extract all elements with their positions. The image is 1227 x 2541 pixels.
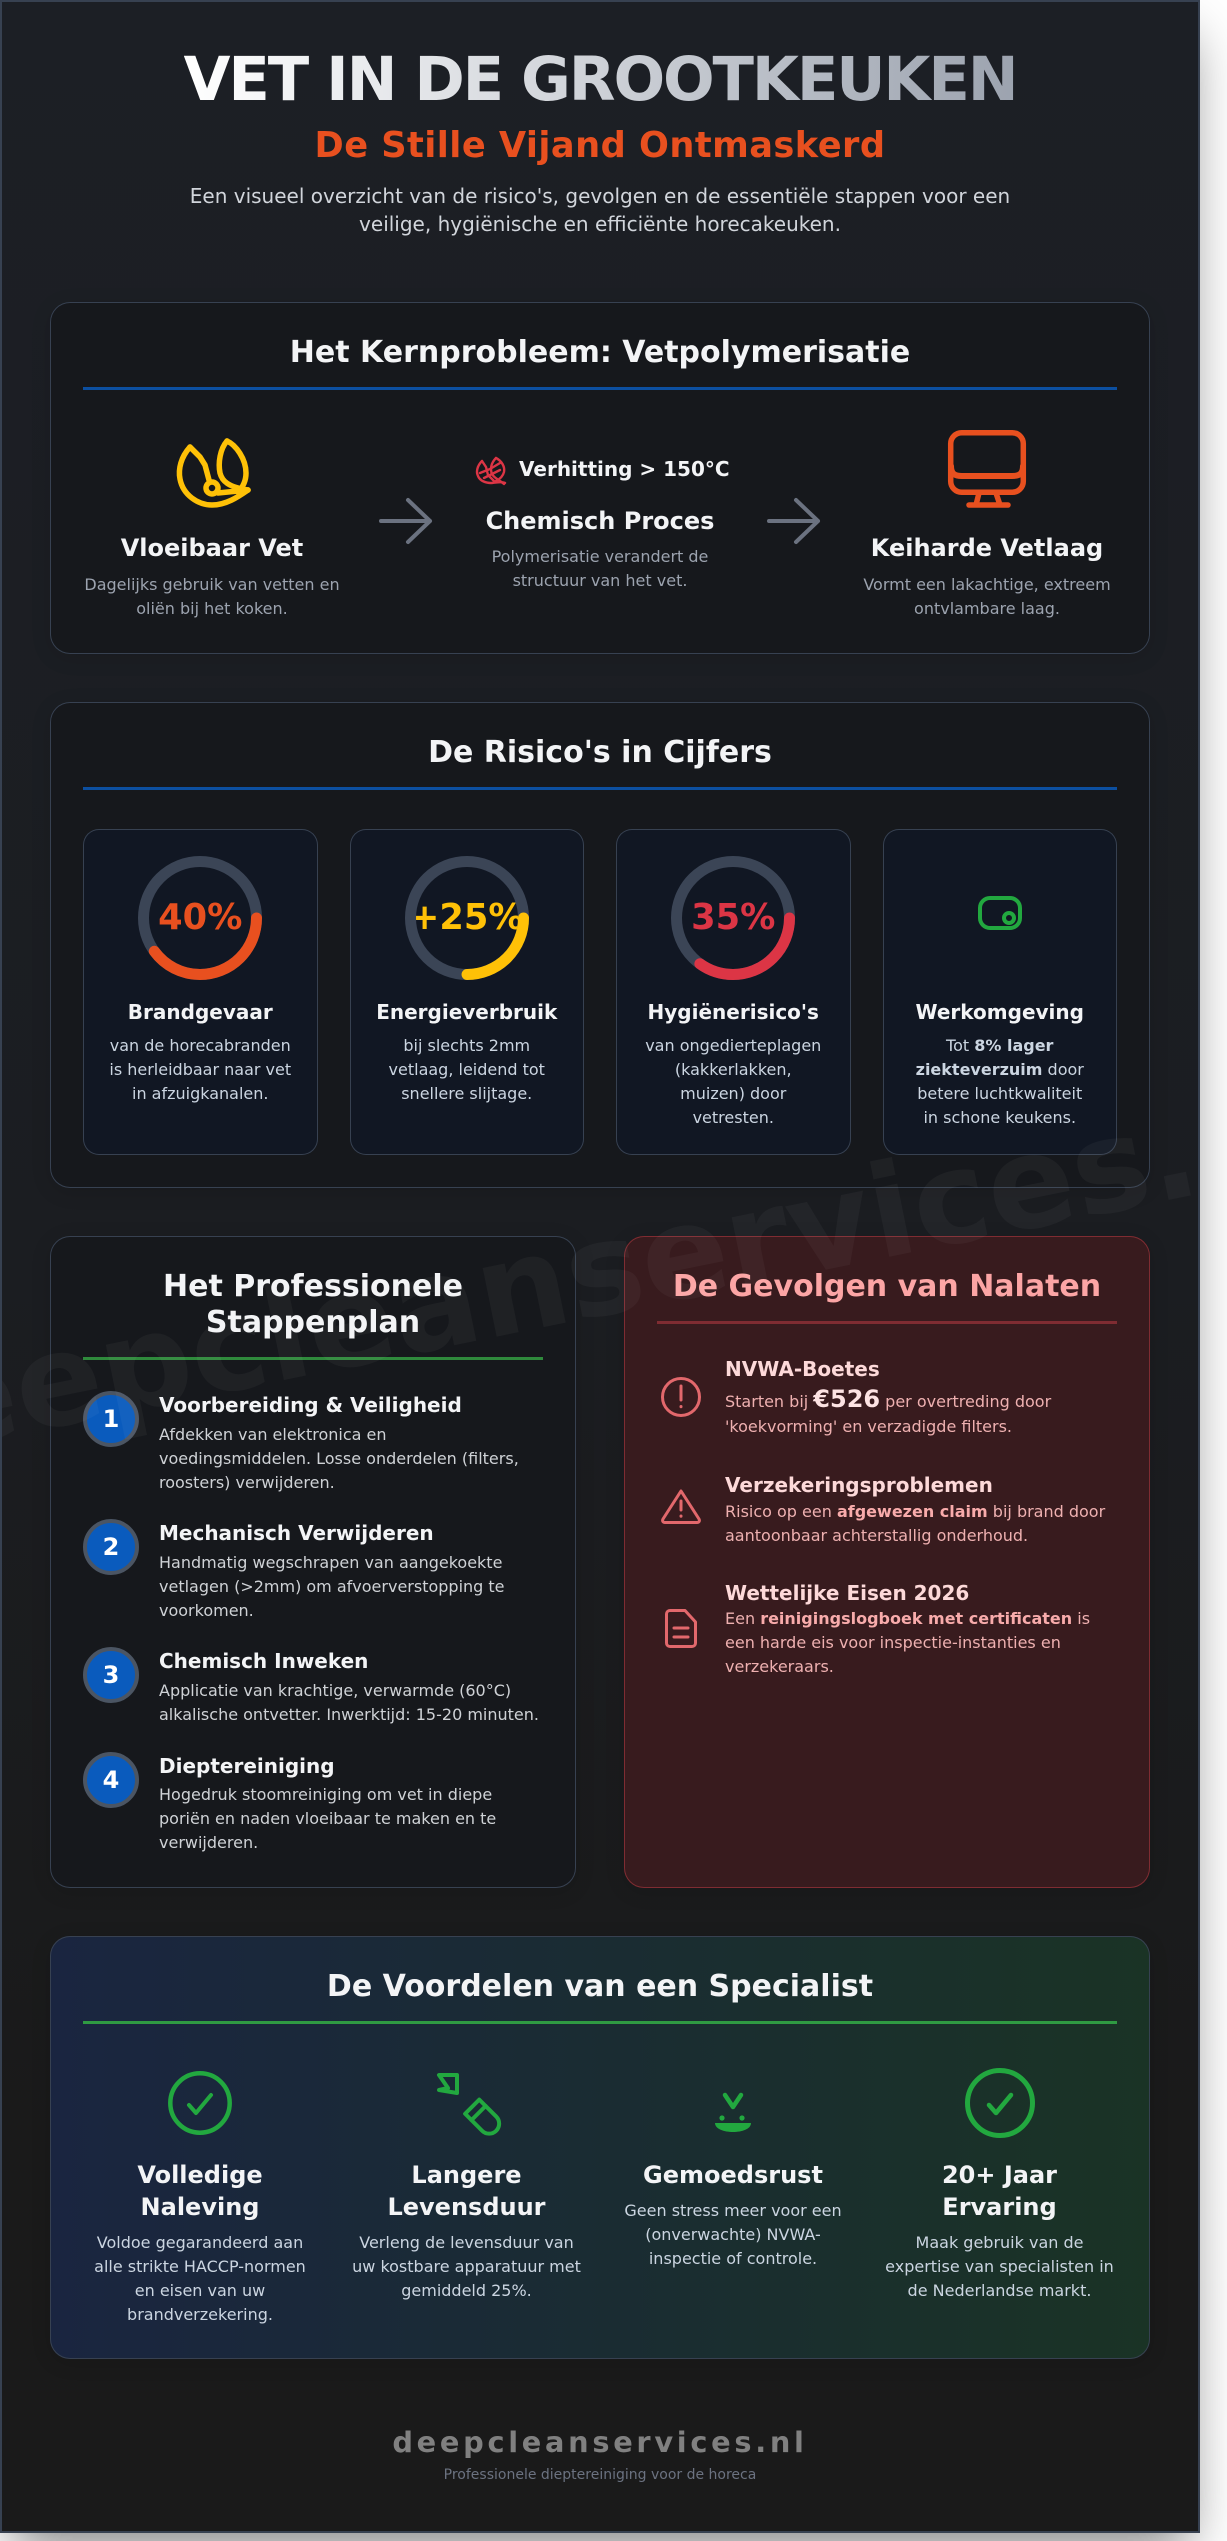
- step text: [159, 1424, 519, 1492]
- label: Energieverbruik: [376, 1000, 557, 1024]
- item: boetes: [661, 1357, 1052, 1436]
- description: [389, 1036, 545, 1102]
- description: [109, 1036, 291, 1102]
- card: energieverbruik: [350, 829, 584, 1155]
- benefit: gemoedsrust: [616, 2066, 850, 2336]
- benefit: naleving: [83, 2066, 317, 2336]
- number badge: [83, 1752, 139, 1808]
- item text: Risico op een afgewezen claim bij brand door: [725, 1502, 1105, 1520]
- step text: alkalische ontvetter. Inwerktijd: 15-20 minuten.: [159, 1704, 539, 1724]
- icon: calm face: [714, 2092, 752, 2134]
- label: Chemisch Proces: [486, 507, 714, 535]
- step text: Afdekken van elektronica en: [159, 1424, 386, 1444]
- label: Naleving: [141, 2193, 259, 2221]
- heading: De Risico's in Cijfers: [428, 735, 772, 770]
- step: chemisch proces: [476, 456, 730, 590]
- card: hygiene: [616, 829, 850, 1155]
- step text: Handmatig wegschrapen van aangekoekte: [159, 1552, 502, 1572]
- description: [916, 1036, 1084, 1126]
- number badge: 2: [103, 1533, 119, 1561]
- item text: een harde eis voor inspectie-instanties en: [725, 1632, 1061, 1652]
- description: betere luchtkwaliteit: [917, 1084, 1082, 1102]
- donut chart 35%: [671, 856, 795, 980]
- description: in schone keukens.: [923, 1108, 1076, 1126]
- item text: verzekeraars.: [725, 1656, 834, 1676]
- description: snellere slijtage.: [401, 1084, 532, 1102]
- item title: Wettelijke Eisen 2026: [725, 1581, 969, 1605]
- description: is herleidbaar naar vet: [109, 1060, 291, 1078]
- label: Brandgevaar: [128, 1000, 273, 1024]
- icon: air quality: [978, 896, 1022, 930]
- item: verzekering: [661, 1473, 1106, 1544]
- description: en eisen van uw: [135, 2280, 265, 2300]
- intro text: veilige, hygiënische en efficiënte horecakeuken.: [359, 212, 841, 236]
- description: expertise van specialisten in: [885, 2256, 1114, 2276]
- label: [882, 2159, 1116, 2223]
- label: Ervaring: [942, 2193, 1057, 2221]
- label: 20+ Jaar: [942, 2161, 1057, 2189]
- description: brandverzekering.: [127, 2304, 273, 2324]
- item text: [725, 1608, 1090, 1676]
- icon: check circle: [168, 2071, 232, 2135]
- arrow: [379, 498, 432, 544]
- title: VET IN DE GROOTKEUKEN: [184, 45, 1016, 115]
- step 2: [83, 1519, 505, 1620]
- label: Hygiënerisico's: [648, 1000, 819, 1024]
- number badge: 3: [103, 1661, 119, 1689]
- step text: [159, 1680, 539, 1724]
- heading: Het Kernprobleem: Vetpolymerisatie: [290, 335, 910, 370]
- step: vloeibaar vet: [84, 438, 340, 618]
- description: structuur van het vet.: [513, 570, 687, 590]
- description: Maak gebruik van de: [916, 2232, 1083, 2252]
- step 3: [83, 1647, 539, 1724]
- icon: flame: [176, 438, 251, 508]
- label: Levensduur: [387, 2193, 546, 2221]
- description: [350, 2230, 584, 2302]
- step title: Dieptereiniging: [159, 1754, 335, 1778]
- item text: aantoonbaar achterstallig onderhoud.: [725, 1526, 1028, 1544]
- benefit: ervaring: [882, 2066, 1116, 2336]
- card: werkomgeving: [882, 829, 1117, 1155]
- description: [84, 574, 340, 618]
- item text: Starten bij €526 per overtreding door: [725, 1384, 1051, 1412]
- description: [83, 2230, 317, 2326]
- step 1: [83, 1391, 519, 1492]
- step text: verwijderen.: [159, 1833, 258, 1852]
- description: alle strikte HACCP-normen: [94, 2256, 306, 2276]
- description: Verleng de levensduur van: [359, 2232, 574, 2252]
- icon: brush: [436, 2073, 502, 2139]
- label: Keiharde Vetlaag: [871, 534, 1103, 562]
- arrow: [767, 498, 820, 544]
- icon: warning triangle: [661, 1489, 701, 1524]
- description: bij slechts 2mm: [403, 1036, 530, 1054]
- label: [83, 2159, 317, 2223]
- label: Werkomgeving: [916, 1000, 1084, 1024]
- description: [492, 546, 708, 590]
- panel: stappenplan: [50, 1236, 576, 1888]
- intro text: Een visueel overzicht van de risico's, gevolgen en de essentiële stappen voor een: [190, 184, 1010, 208]
- panel: kernprobleem: [50, 302, 1150, 654]
- benefit: levensduur: [350, 2066, 584, 2336]
- description: [645, 1036, 821, 1126]
- heading: Het Professionele: [163, 1269, 463, 1304]
- value: 35%: [691, 897, 775, 938]
- heading: De Voordelen van een Specialist: [327, 1969, 873, 2004]
- number badge: [83, 1647, 139, 1703]
- step text: roosters) verwijderen.: [159, 1472, 335, 1492]
- tagline: Professionele dieptereiniging voor de horeca: [444, 2467, 756, 2483]
- description: [616, 2198, 850, 2270]
- label: Langere: [411, 2161, 522, 2189]
- header: [184, 45, 1016, 236]
- item text: [725, 1502, 1106, 1544]
- description: [882, 2230, 1116, 2302]
- panel: risico's: [50, 702, 1150, 1188]
- description: Dagelijks gebruik van vetten en: [84, 574, 340, 594]
- item title: NVWA-Boetes: [725, 1357, 880, 1381]
- item title: Verzekeringsproblemen: [725, 1473, 993, 1497]
- step text: [159, 1552, 505, 1620]
- icon: document: [665, 1609, 697, 1648]
- panel: gevolgen: [624, 1236, 1150, 1888]
- number badge: [83, 1391, 139, 1447]
- card: brandgevaar: [83, 829, 318, 1155]
- icon: small flame: [476, 456, 506, 486]
- step text: voorkomen.: [159, 1600, 254, 1620]
- number badge: 4: [103, 1766, 119, 1794]
- label: temperature: Verhitting > 150°C: [519, 457, 730, 481]
- value: +25%: [410, 897, 524, 938]
- item text: Een reinigingslogboek met certificaten is: [725, 1608, 1090, 1628]
- number badge: [83, 1519, 139, 1575]
- description: [863, 574, 1111, 618]
- step title: Mechanisch Verwijderen: [159, 1521, 434, 1545]
- description: (onverwachte) NVWA-: [645, 2224, 821, 2244]
- description: vetlaag, leidend tot: [389, 1060, 545, 1078]
- description: vetresten.: [693, 1108, 774, 1126]
- icon: check circle: [964, 2068, 1034, 2138]
- subtitle: De Stille Vijand Ontmaskerd: [315, 124, 885, 166]
- intro text: [190, 184, 1010, 236]
- description: in afzuigkanalen.: [132, 1084, 268, 1102]
- icon: monitor: [948, 430, 1026, 508]
- step title: Voorbereiding & Veiligheid: [159, 1393, 462, 1417]
- step text: voedingsmiddelen. Losse onderdelen (filters,: [159, 1448, 519, 1468]
- description: (kakkerlakken,: [675, 1060, 792, 1078]
- step 4: [83, 1752, 496, 1852]
- step title: Chemisch Inweken: [159, 1649, 368, 1673]
- description: ontvlambare laag.: [914, 598, 1060, 618]
- brand name: deepcleanservices.nl: [392, 2424, 808, 2458]
- step text: [159, 1785, 496, 1852]
- description: inspectie of controle.: [649, 2248, 817, 2268]
- description: gemiddeld 25%.: [401, 2280, 532, 2300]
- heading: [163, 1269, 463, 1340]
- description: Voldoe gegarandeerd aan: [97, 2232, 303, 2252]
- description: oliën bij het koken.: [136, 598, 288, 618]
- description: muizen) door: [680, 1084, 786, 1102]
- step text: Hogedruk stoomreiniging om vet in diepe: [159, 1785, 492, 1804]
- description: ziekteverzuim door: [916, 1060, 1084, 1078]
- description: van de horecabranden: [110, 1036, 291, 1054]
- step text: poriën en naden vloeibaar te maken en te: [159, 1809, 496, 1828]
- donut chart 40%: [138, 856, 262, 980]
- item: wettelijke eisen: [665, 1581, 1090, 1676]
- description: Polymerisatie verandert de: [492, 546, 708, 566]
- label: Gemoedsrust: [643, 2161, 823, 2189]
- description: Vormt een lakachtige, extreem: [863, 574, 1111, 594]
- description: Geen stress meer voor een: [624, 2200, 842, 2220]
- step text: vetlagen (>2mm) om afvoerverstopping te: [159, 1576, 505, 1596]
- number badge: 1: [103, 1405, 119, 1433]
- step text: Applicatie van krachtige, verwarmde (60°C): [159, 1680, 511, 1700]
- panel: voordelen: [50, 1936, 1150, 2359]
- label: Vloeibaar Vet: [121, 534, 303, 562]
- icon: alert circle: [661, 1377, 701, 1417]
- heading: De Gevolgen van Nalaten: [673, 1269, 1101, 1304]
- description: van ongedierteplagen: [645, 1036, 821, 1054]
- footer: [0, 2420, 1200, 2490]
- description: de Nederlandse markt.: [908, 2280, 1091, 2300]
- label: [350, 2159, 584, 2223]
- description: uw kostbare apparatuur met: [352, 2256, 581, 2276]
- donut chart 25%: [405, 856, 529, 980]
- item text: 'koekvorming' en verzadigde filters.: [725, 1416, 1012, 1436]
- description: Tot 8% lager: [946, 1036, 1053, 1054]
- heading: Stappenplan: [206, 1305, 420, 1340]
- step: keiharde vetlaag: [863, 430, 1111, 618]
- value: 40%: [158, 897, 242, 938]
- label: Volledige: [137, 2161, 263, 2189]
- item text: [725, 1384, 1052, 1436]
